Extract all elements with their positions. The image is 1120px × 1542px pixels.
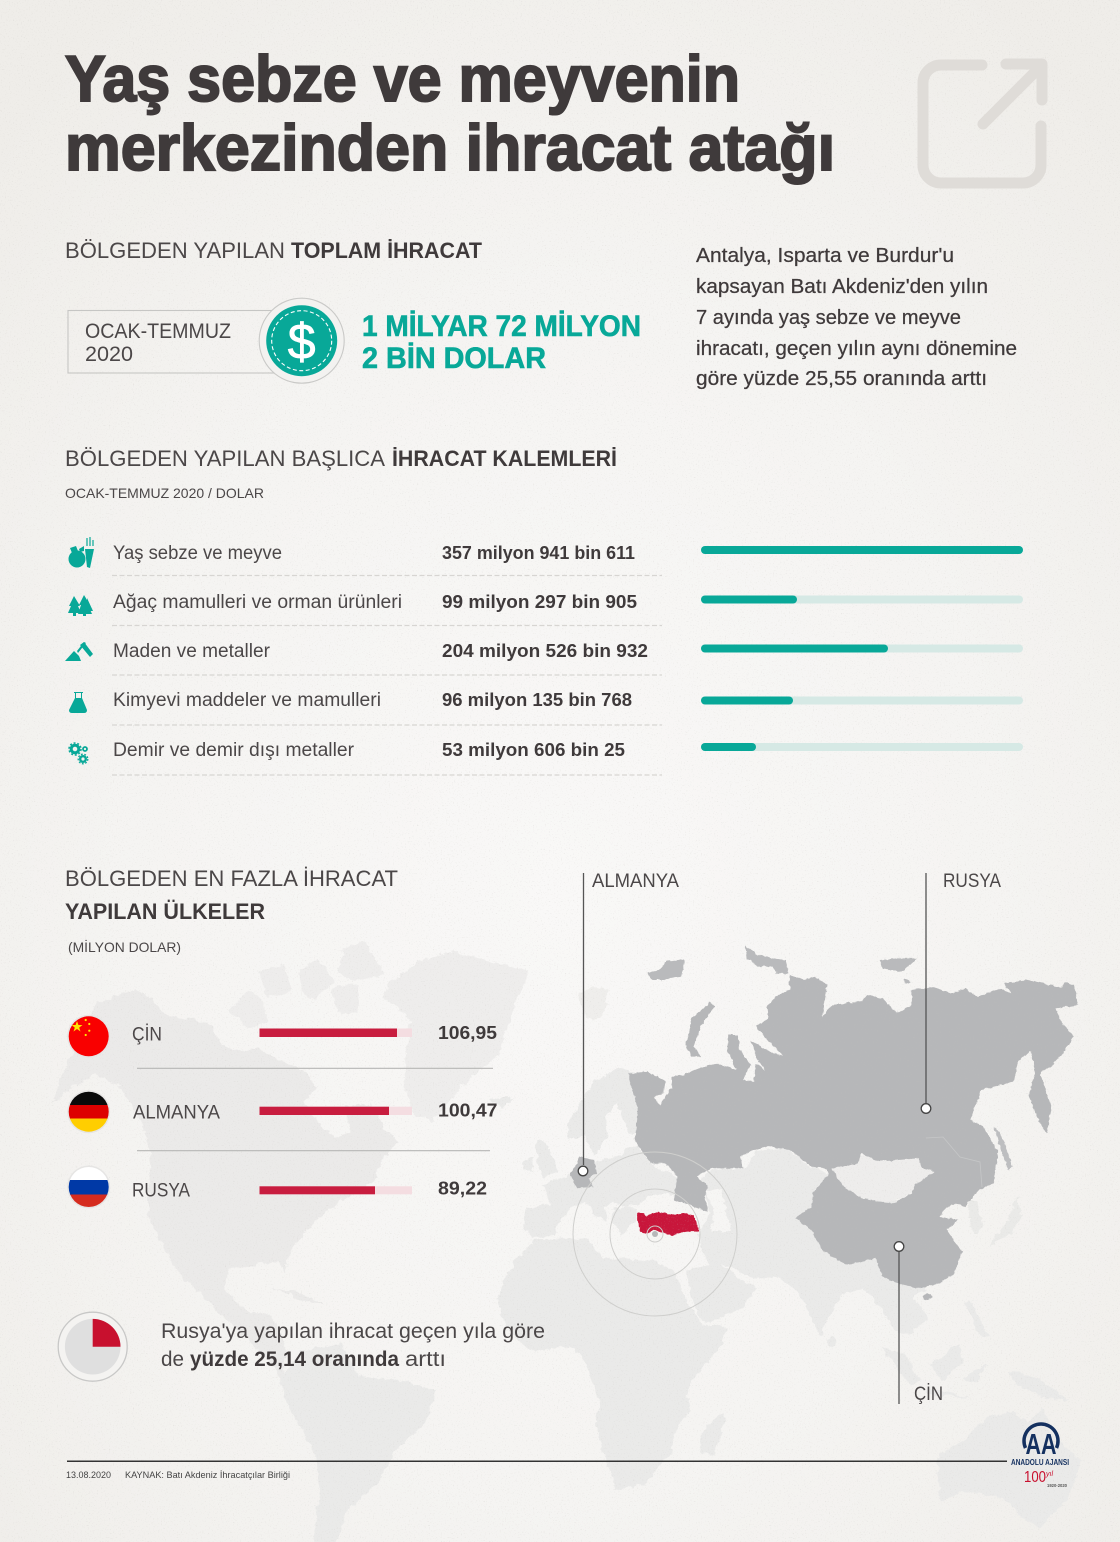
map: Mongolia [825,1145,935,1200]
row: Russia: RUSYA [132,1180,190,1202]
dark map countries [570,945,1078,1300]
logo: Anadolu Ajansı: 1920-2020 [1047,1483,1067,1488]
icon: Germany flag [67,1090,110,1133]
row: Russia: 89,22 [438,1177,487,1198]
map pin: Russia [921,873,931,1113]
map: Hainan [923,1293,932,1300]
logo: Anadolu Ajansı: AA [1026,1429,1057,1461]
radar circles around Turkey [573,1152,737,1316]
map: Russia and China [629,975,1078,1288]
row: Germany: ALMANYA [133,1102,220,1124]
heading: export items: BÖLGEDEN YAPILAN BAŞLICA [65,446,385,471]
logo: Anadolu Ajansı: 100 [1024,1469,1046,1486]
map: Cuba [270,1287,323,1302]
icon: Russia flag [67,1166,110,1208]
Russia callout text: arttı [405,1348,446,1371]
map: Europe [487,1067,677,1237]
row 3: Maden ve metaller [113,641,271,662]
total export value: 1 MİLYAR 72 MİLYON [362,310,641,343]
map: Arctic islands [227,940,383,1027]
pie chart: Russia increase [58,1312,127,1381]
icon: China flag [67,1015,110,1058]
map: Greenland [383,950,527,1120]
map: Turkey [637,1212,699,1236]
row 4: 96 milyon 135 bin 768 [442,690,632,710]
map pin: China [894,1242,904,1404]
logo: Anadolu Ajansı [1011,1424,1069,1488]
map label: Germany: ALMANYA [592,870,679,892]
map: Korea and Japan [966,1195,1020,1245]
heading: export items: İHRACAT KALEMLERİ [392,446,617,471]
row 2 [68,592,1023,616]
map: Svalbard [576,985,608,1020]
map label: China: ÇİN [914,1382,943,1405]
intro paragraph: kapsayan Batı Akdeniz'den yılın [696,276,988,298]
heading: top countries [65,866,398,924]
map: Sakhalin [994,1127,1013,1170]
row 3: 204 milyon 526 bin 932 [442,641,648,661]
row: Germany: 100,47 [438,1100,498,1121]
title [65,42,835,184]
row 4 [69,690,1023,713]
row: China: 106,95 [438,1022,497,1043]
heading: total export [65,238,482,263]
intro paragraph: göre yüzde 25,55 oranında arttı [696,368,987,390]
logo: Anadolu Ajansı: ANADOLU AJANSI [1011,1457,1069,1467]
Russia callout text: de [161,1348,184,1371]
unit label: (MİLYON DOLAR) [68,938,181,955]
total export value: 2 BİN DOLAR [362,342,546,375]
footer rule [67,1460,1007,1462]
map: Africa, Arabia, Madagascar, Indonesia, Australia [496,1237,1080,1527]
row: China: ÇİN [132,1023,162,1046]
map: Asia [697,1147,927,1337]
Russia callout text: Rusya'ya yapılan ihracat geçen yıla göre [161,1320,545,1343]
heading: top countries: BÖLGEDEN EN FAZLA İHRACAT [65,866,398,891]
background world map [50,940,1080,1542]
row 5 [69,740,1023,764]
title: Yaş sebze ve meyvenin [65,42,740,115]
icon: flask [69,692,87,713]
intro paragraph: Antalya, Isparta ve Burdur'u [696,245,954,267]
export items table [65,537,1023,775]
footer source: 13.08.2020 [66,1470,111,1481]
row: China [67,1015,497,1058]
row 5: 53 milyon 606 bin 25 [442,740,625,760]
heading: total export: BÖLGEDEN YAPILAN [65,238,285,263]
intro paragraph: 7 ayında yaş sebze ve meyve [696,307,961,329]
row 4: Kimyevi maddeler ve mamulleri [113,690,381,711]
map: South America [279,1342,436,1542]
subheading: OCAK-TEMMUZ 2020 / DOLAR [65,485,264,501]
map pin: Germany [578,873,588,1176]
period label [68,310,293,373]
icon: dollar coin [259,298,344,383]
Russia callout text: yüzde 25,14 oranında [190,1348,399,1371]
map: North America [50,988,397,1380]
row 3 [65,641,1023,662]
icon: mine [65,642,93,661]
row 5: Demir ve demir dışı metaller [113,740,355,761]
Russia callout text [161,1320,545,1371]
period label: OCAK-TEMMUZ [85,320,231,343]
map: Arctic archipelagos [647,945,917,983]
map: Russia-China border [926,1137,982,1187]
row 1: 357 milyon 941 bin 611 [442,543,635,563]
icon: dollar coin: $ [288,314,316,370]
row: Germany [67,1090,497,1133]
map label: Russia: RUSYA [943,870,1001,892]
map: Novaya Zemlya [686,1003,715,1057]
icon: gears [69,743,88,764]
row 2: Ağaç mamulleri ve orman ürünleri [113,592,402,613]
intro paragraph [696,245,1017,390]
row 2: 99 milyon 297 bin 905 [442,592,637,612]
period label: 2020 [85,343,133,366]
footer source: KAYNAK: Batı Akdeniz İhracatçılar Birliği [125,1470,290,1481]
icon: trees [68,595,93,616]
icon: fruit and vegetable [68,537,94,568]
heading: top countries: YAPILAN ÜLKELER [65,899,265,924]
heading: total export: TOPLAM İHRACAT [291,238,482,263]
intro paragraph: ihracatı, geçen yılın aynı dönemine [696,338,1017,360]
total export value [362,310,641,375]
logo: Anadolu Ajansı: yıl [1045,1471,1053,1478]
icon: external link [923,64,1042,183]
total export box [68,298,344,383]
country rows [67,1015,497,1208]
row: Russia [67,1166,487,1208]
map: Germany [570,1157,597,1188]
heading: export items [65,446,617,471]
row 1 [68,537,1023,568]
title: merkezinden ihracat atağı [65,111,835,184]
row 1: Yaş sebze ve meyve [113,543,282,564]
